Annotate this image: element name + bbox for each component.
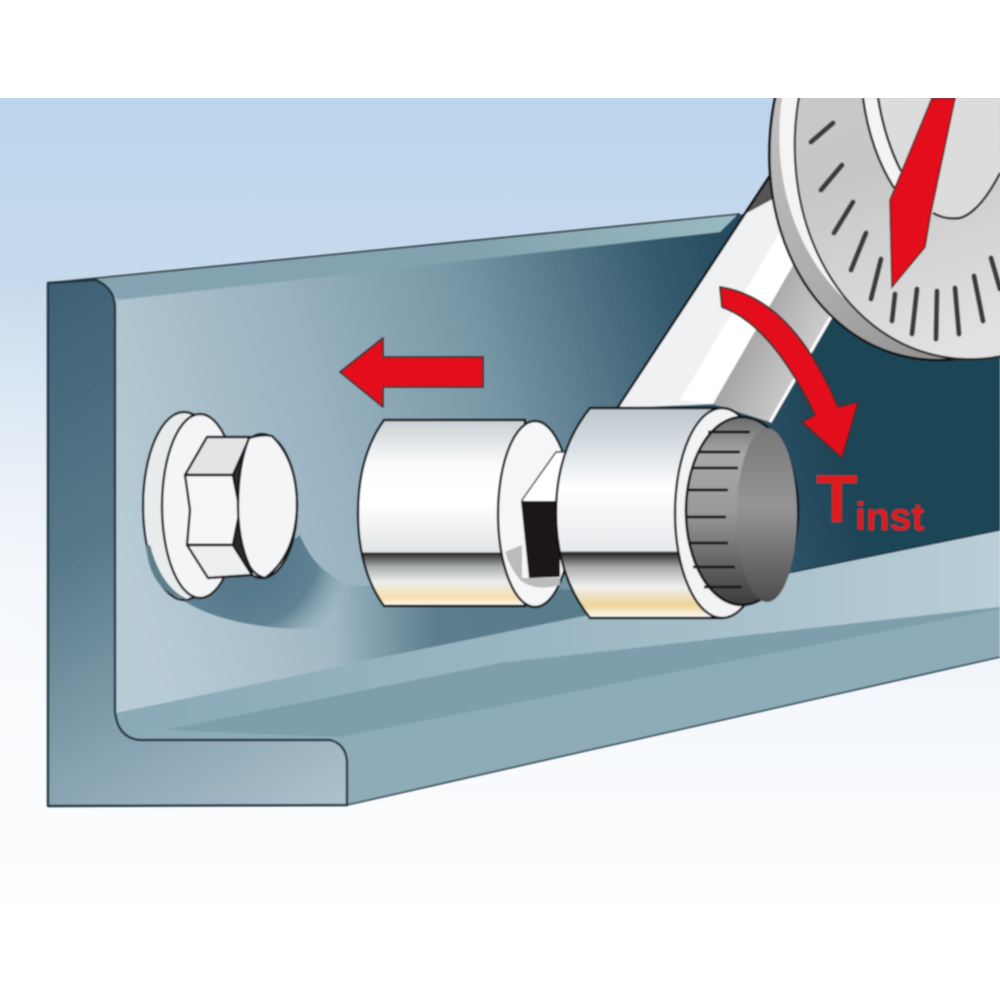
horizontal flange of steel angle [100,530,1000,805]
arrow: torque direction [720,287,858,458]
knurled head [686,417,798,605]
label: T inst: T [816,461,858,537]
socket shadow on face [348,586,586,663]
torque wrench bar [616,165,832,422]
dial inner disc [880,98,1000,218]
dial red pointer [890,98,955,287]
vertical flange face of steel angle [48,189,1000,712]
arrow: push direction [340,338,483,407]
socket two [556,408,722,618]
dial scale ticks [811,123,1000,339]
cap face [737,428,797,602]
dial gauge [719,0,1000,403]
socket one [358,420,525,606]
steel angle end section [48,280,347,806]
flange nut on steel [143,412,297,600]
square drive [521,501,560,578]
bolt shadow on face [184,534,340,629]
dial inner arcs [863,98,1000,218]
label: T inst: inst [855,496,924,539]
square drive neck [498,421,572,607]
knurl lines [686,432,750,587]
dial white band [863,98,901,188]
socket rim [672,406,746,620]
